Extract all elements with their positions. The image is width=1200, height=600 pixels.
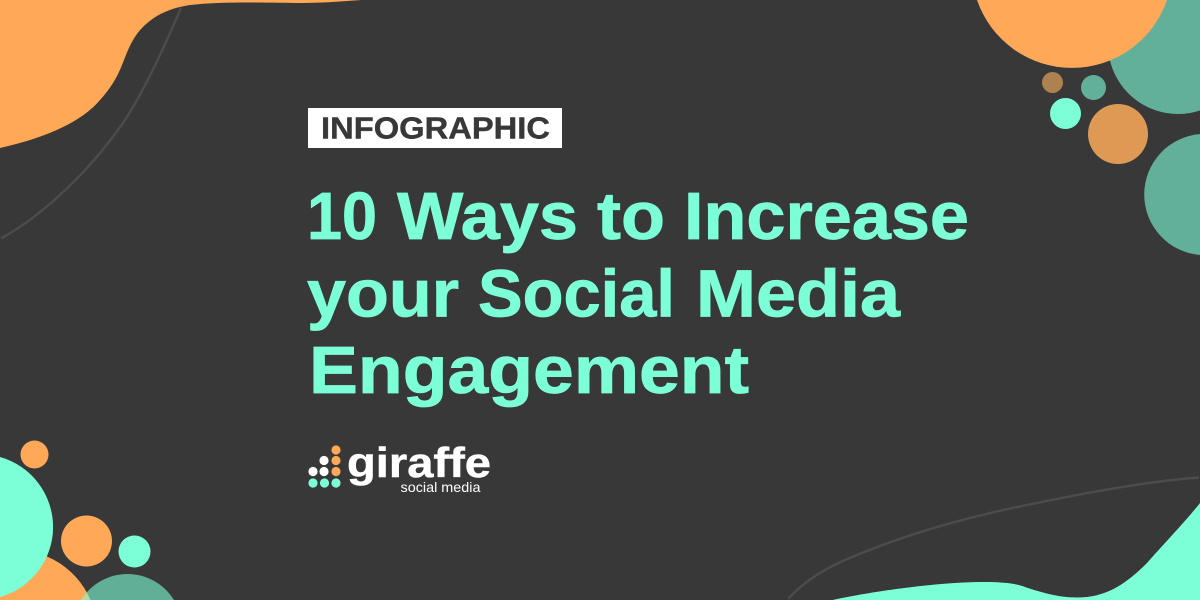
- label: infographic tag: INFOGRAPHIC: [321, 111, 550, 146]
- title: to: [597, 179, 665, 254]
- title: Media: [696, 256, 901, 331]
- title: Engagement: [309, 333, 749, 408]
- title: Increase: [684, 179, 969, 254]
- orange blob top left: [0, 0, 362, 148]
- title: Social: [478, 256, 675, 331]
- curved line bottom right: [788, 478, 1199, 599]
- logo tagline: social media: [400, 479, 481, 495]
- title: Ways: [397, 179, 578, 254]
- mint blob bottom right: [833, 503, 1200, 600]
- circle cluster bottom left: [0, 440, 174, 600]
- title: 10: [307, 179, 377, 254]
- circle cluster top right: [977, 0, 1200, 255]
- title: your: [307, 256, 459, 331]
- logo: giraffe social media: [308, 439, 491, 495]
- icon: dot grid: [308, 445, 341, 488]
- logo wordmark: giraffe: [347, 439, 491, 486]
- curved line top left: [1, 8, 181, 238]
- title: [307, 179, 969, 408]
